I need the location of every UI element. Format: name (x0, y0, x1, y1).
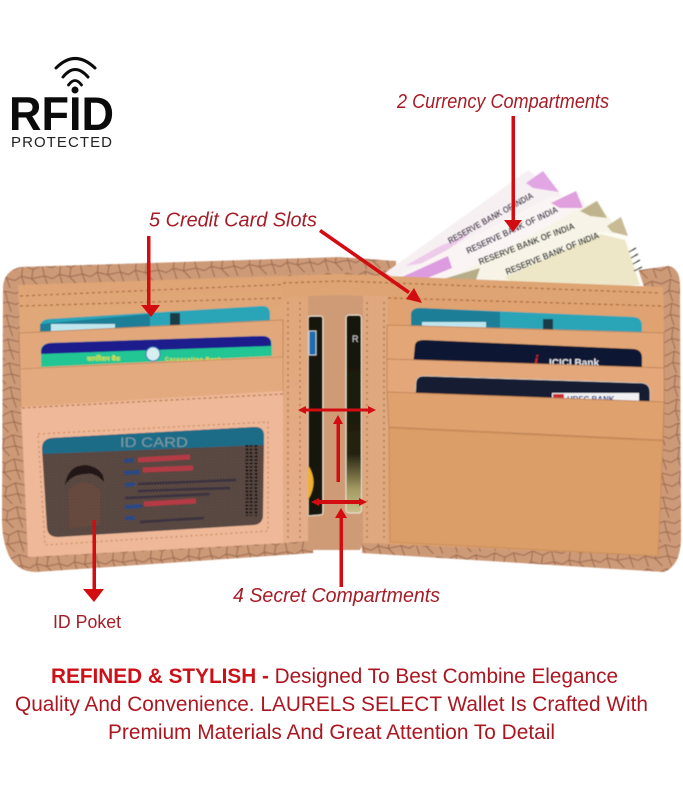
label: 4 secret compartments: 4 Secret Compartments (233, 585, 440, 607)
top band across spine (283, 274, 664, 306)
id field lines (124, 445, 256, 522)
card slot hdfc (415, 376, 650, 406)
card slot icici: ICICI Bank (549, 358, 599, 369)
id pocket face (21, 391, 283, 557)
logo: RFID protected (9, 58, 114, 151)
secret card left (308, 316, 323, 516)
line 3: Premium Materials And Great Attention To Detail (108, 720, 555, 744)
note 2 pink: RESERVE BANK OF INDIA (465, 204, 560, 256)
currency notes (385, 170, 645, 292)
icon: wireless signal (56, 58, 95, 94)
protected caption: PROTECTED (11, 134, 112, 151)
arrow: id pocket (83, 520, 104, 602)
card slot green (41, 336, 272, 367)
label: id pocket: ID Poket (53, 612, 121, 632)
line 2: Quality And Convenience. LAURELS SELECT Wallet Is Crafted With (15, 692, 648, 716)
pocket right 1 (387, 325, 664, 368)
card slot green: कार्पोरेशन बैंक (86, 355, 121, 363)
pocket 1 (19, 320, 283, 369)
wallet outer textured shell (2, 257, 681, 572)
note 3 tan: RESERVE BANK OF INDIA (477, 221, 576, 267)
note 4 tan: RESERVE BANK OF INDIA (504, 230, 601, 277)
label: 5 credit card slots: 5 Credit Card Slots (149, 210, 317, 232)
RFID wordmark: RFID (9, 87, 114, 140)
wallet photo (2, 170, 681, 572)
id card window (42, 427, 264, 537)
note 1 pink: RESERVE BANK OF INDIA (446, 190, 535, 246)
arrow: secret compartments top (298, 406, 376, 414)
pocket right 2 (387, 359, 664, 402)
card slot teal (40, 306, 270, 332)
note 4 tan (495, 217, 645, 290)
arrow: credit slot right (319, 229, 422, 303)
card slot hdfc: HDFC BANK (567, 395, 615, 404)
card slot teal right (411, 308, 642, 336)
center spine (305, 290, 363, 550)
arrow: credit slot left (141, 236, 160, 317)
card slot icici (413, 340, 642, 372)
main lower pocket (389, 428, 663, 556)
pocket 2 (20, 357, 283, 408)
secret card right: R (352, 334, 359, 344)
secret card right (346, 315, 362, 513)
arrow: currency (504, 116, 522, 232)
card slot green: Corporation Bank (165, 357, 222, 363)
arrow: secret compartments bottom (311, 498, 367, 506)
right wallet panel (283, 274, 664, 556)
arrow: secret compartments small up (333, 415, 343, 482)
card slot icici: i (534, 353, 539, 370)
id card window: ID CARD (120, 434, 188, 450)
pocket right 3 (387, 392, 664, 440)
note 1 pink (385, 170, 570, 290)
line 1: REFINED & STYLISH - Designed To Best Combine Elegance (51, 664, 618, 688)
left wallet panel (18, 276, 340, 557)
top band stitching (20, 282, 340, 306)
note 3 tan (440, 200, 625, 290)
photo silhouette (65, 465, 104, 485)
note 2 pink (393, 191, 590, 292)
label: 2 currency compartments: 2 Currency Compartments (396, 91, 609, 113)
description text (15, 664, 648, 744)
arrow: secret compartments up (335, 508, 347, 587)
